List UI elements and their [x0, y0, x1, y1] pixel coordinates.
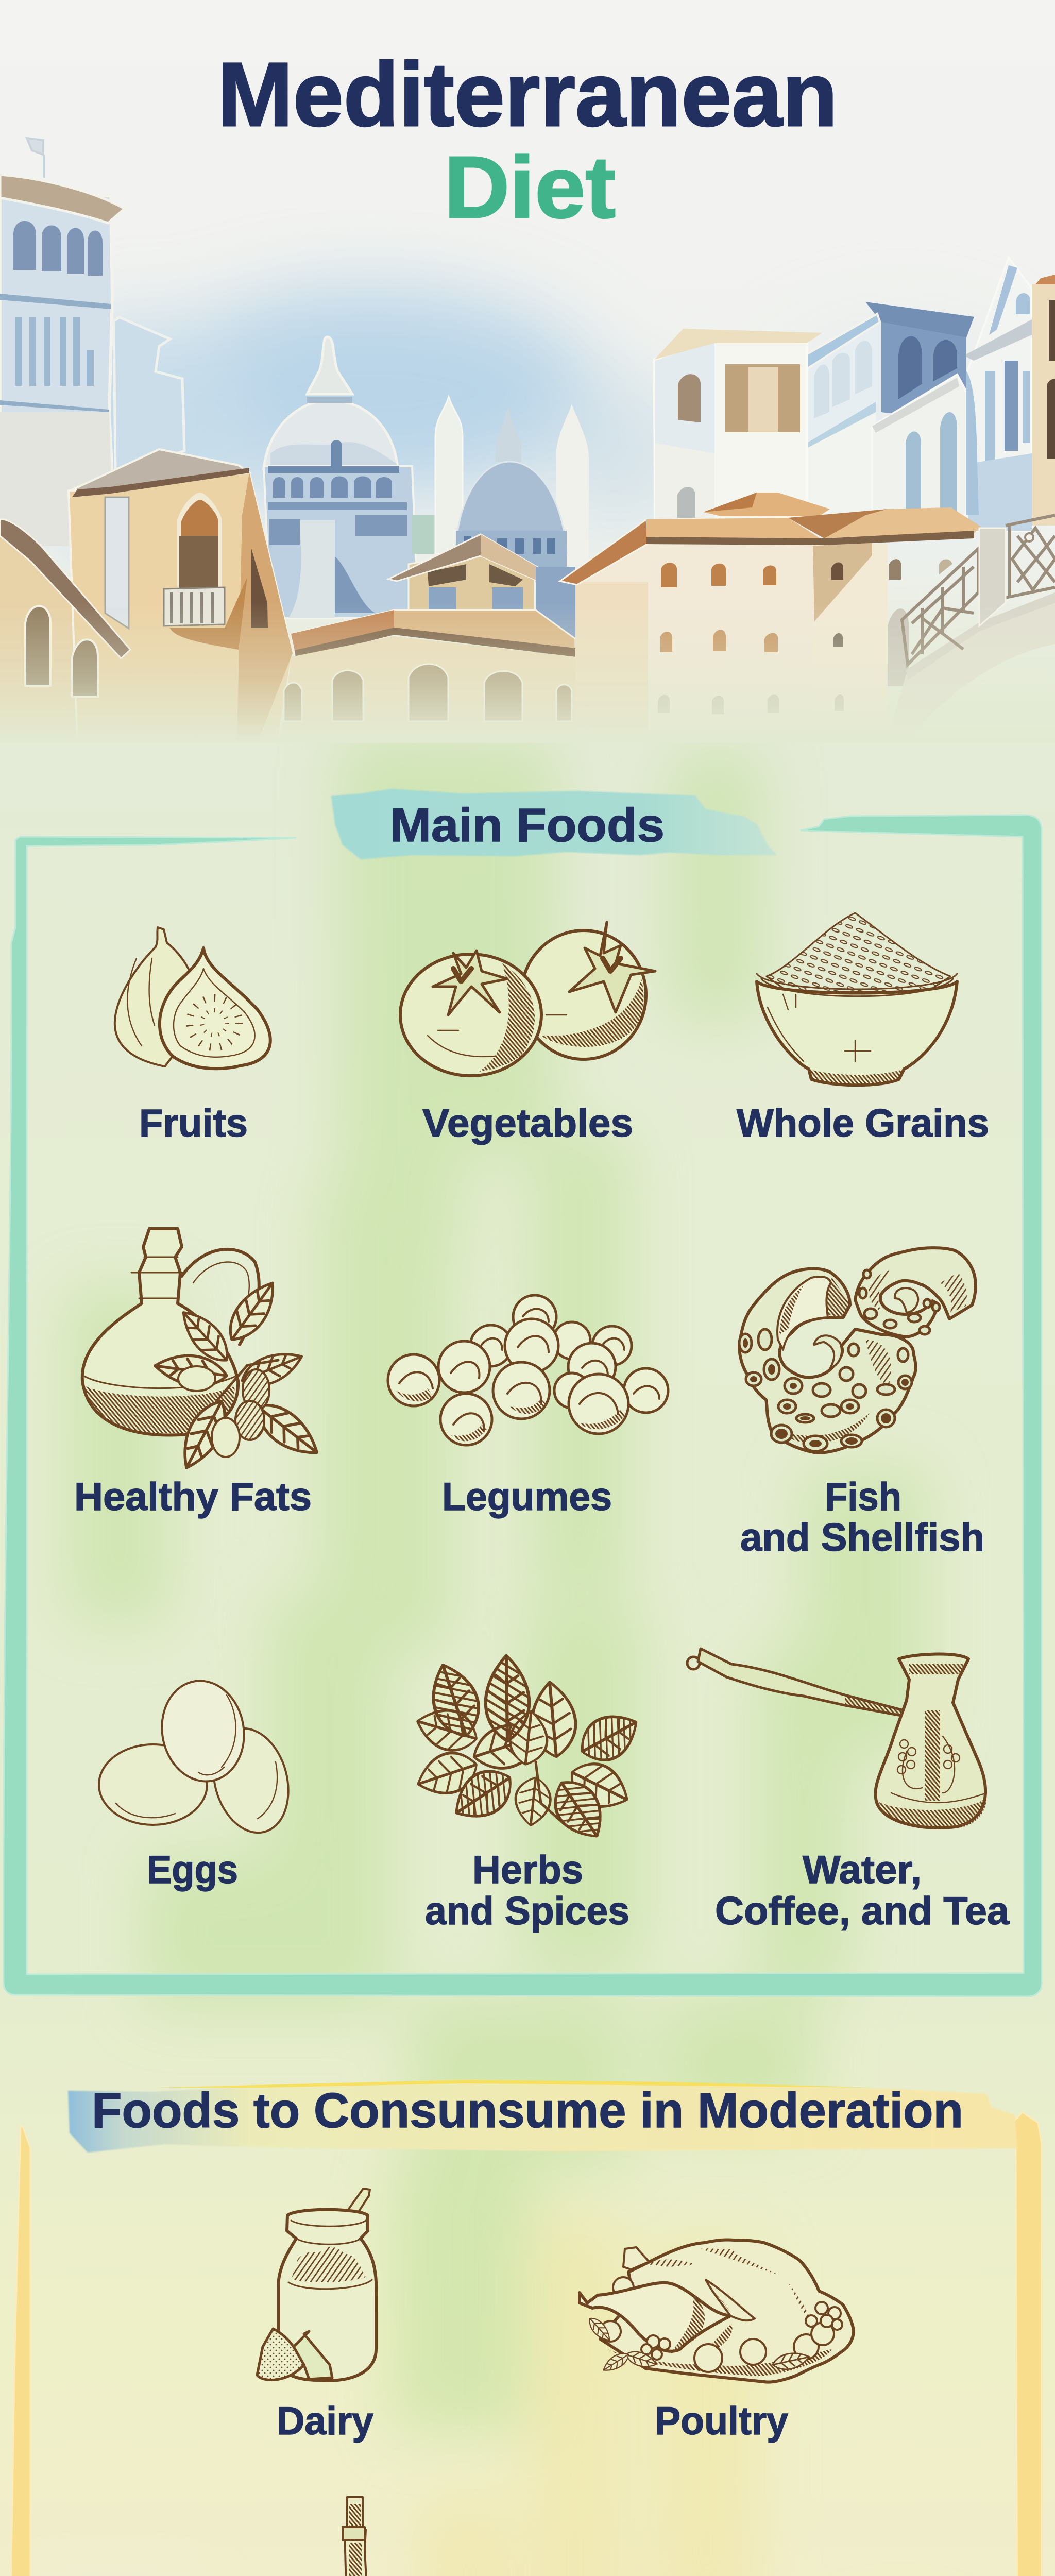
label: fruits: Fruits	[139, 1101, 248, 1145]
item: fruits	[115, 927, 270, 1145]
stone bridge with railing	[886, 515, 1055, 742]
icon: octopus tentacles	[739, 1248, 975, 1453]
front left building with balcony	[0, 449, 293, 742]
item: herbs and spices	[412, 1655, 646, 1933]
title	[217, 44, 838, 236]
heading brush: moderation	[68, 2080, 1017, 2153]
label: dairy: Dairy	[277, 2399, 373, 2443]
label: fish and shellfish: and Shellfish	[740, 1516, 984, 1560]
pavilion and tiled roof	[291, 534, 575, 659]
item: eggs	[99, 1674, 299, 1892]
item: water coffee and tea	[687, 1649, 1010, 1933]
title: Mediterranean	[217, 44, 838, 145]
icon: yogurt jar	[257, 2189, 376, 2381]
item: whole grains	[737, 913, 989, 1145]
icon: eggs	[99, 1674, 299, 1841]
heading: moderation: Foods to Consunsume in Moderation	[92, 2083, 963, 2138]
label: water coffee and tea	[715, 1848, 1010, 1933]
label: whole grains: Whole Grains	[737, 1101, 989, 1145]
label: vegetables: Vegetables	[422, 1101, 633, 1145]
label: healthy fats: Healthy Fats	[74, 1475, 312, 1519]
item: legumes	[388, 1295, 668, 1519]
heading brush: main foods	[331, 789, 777, 859]
right low building with terracotta roof	[560, 493, 981, 742]
label: eggs: Eggs	[147, 1848, 238, 1892]
item: poultry	[580, 2240, 854, 2443]
icon: chickpeas	[388, 1295, 668, 1445]
icon: herb sprigs	[412, 1655, 646, 1848]
label: herbs and spices: Herbs	[472, 1848, 583, 1892]
panel: main foods	[4, 789, 1042, 1996]
icon: wine bottle and grapes	[248, 2497, 385, 2576]
right blue buildings	[795, 258, 1055, 531]
low arched building	[281, 636, 575, 742]
icon: figs	[115, 927, 270, 1069]
icon: tomatoes	[400, 922, 655, 1076]
frame: moderation	[7, 2112, 1042, 2576]
label: poultry: Poultry	[655, 2399, 788, 2443]
label: legumes: Legumes	[442, 1475, 612, 1519]
label: water coffee and tea: Water,	[803, 1848, 922, 1892]
icon: roast chicken	[580, 2240, 854, 2382]
icon: coffee pot	[687, 1649, 986, 1829]
frame: main foods	[4, 815, 1042, 1996]
icon: olive oil cruet	[82, 1229, 326, 1475]
item: dairy	[257, 2189, 376, 2443]
label: herbs and spices: and Spices	[425, 1889, 629, 1933]
icon: rice bowl	[757, 913, 957, 1085]
label: fish and shellfish	[740, 1475, 984, 1560]
heading accent: moderation	[155, 2080, 876, 2088]
label: water coffee and tea: Coffee, and Tea	[715, 1889, 1010, 1933]
far domes and spires	[412, 397, 589, 582]
item: fish and shellfish	[739, 1248, 984, 1560]
title: Diet	[444, 139, 616, 236]
item: red wine	[237, 2497, 412, 2576]
heading: main foods: Main Foods	[390, 799, 665, 852]
label: fish and shellfish: Fish	[825, 1475, 901, 1519]
right white building with shutters	[654, 329, 822, 520]
illustration: Mediterranean town skyline	[0, 138, 1055, 743]
panel: moderation	[7, 2080, 1042, 2576]
tower with flag	[0, 138, 184, 546]
dome church left	[264, 337, 418, 618]
label: herbs and spices	[425, 1848, 629, 1933]
item: healthy fats	[74, 1229, 326, 1519]
item: vegetables	[400, 922, 655, 1145]
